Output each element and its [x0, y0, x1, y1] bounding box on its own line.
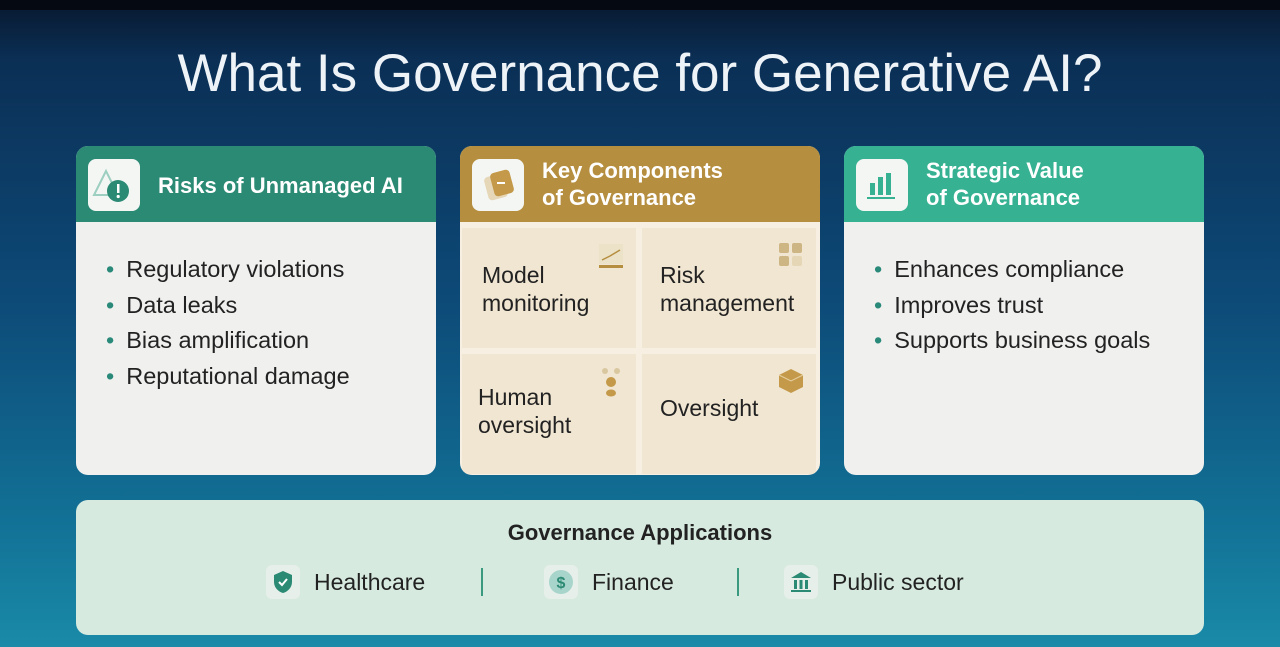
cell: oversight	[642, 354, 816, 474]
header: strategic: Strategic Value	[926, 158, 1084, 183]
panel: applications	[76, 500, 1204, 635]
list: strategic: Improves trust	[894, 292, 1043, 318]
cell: model monitoring: Model	[482, 262, 545, 288]
title: What Is Governance for Generative AI?	[177, 44, 1102, 103]
cell: human oversight: Human	[478, 384, 552, 410]
list: risks: Reputational damage	[126, 362, 350, 388]
app: finance	[544, 565, 674, 599]
header: components: of Governance	[542, 185, 696, 210]
cell: human oversight: oversight	[478, 412, 571, 438]
header: risks: Risks of Unmanaged AI	[158, 173, 403, 198]
panel: risks	[76, 146, 436, 475]
app: finance: Finance	[592, 568, 674, 594]
list: strategic: Supports business goals	[894, 327, 1150, 353]
app: public sector	[784, 565, 964, 599]
cell: risk management: management	[660, 290, 794, 316]
list: risks	[106, 256, 350, 389]
icon: bar chart	[856, 159, 908, 211]
cell: model monitoring: monitoring	[482, 290, 589, 316]
heading: applications: Governance Applications	[508, 520, 772, 545]
cell: risk management: Risk	[660, 262, 705, 288]
icon: warning	[88, 159, 140, 211]
panel: key components	[460, 146, 820, 475]
app: healthcare: Healthcare	[314, 568, 425, 594]
list: strategic: Enhances compliance	[894, 256, 1124, 282]
cell: human oversight	[462, 354, 636, 474]
cell: model monitoring	[462, 228, 636, 348]
header: components: Key Components	[542, 158, 723, 183]
icon: document	[472, 159, 524, 211]
list: risks: Regulatory violations	[126, 256, 344, 282]
cell: risk management	[642, 228, 816, 348]
list: risks: Data leaks	[126, 292, 237, 318]
list: strategic	[874, 256, 1150, 353]
cell: oversight: Oversight	[660, 395, 758, 421]
header: components	[460, 146, 820, 222]
header: risks	[76, 146, 436, 222]
panel: strategic value	[844, 146, 1204, 475]
app: healthcare	[266, 565, 425, 599]
header: strategic: of Governance	[926, 185, 1080, 210]
app: public sector: Public sector	[832, 568, 964, 594]
header: strategic	[844, 146, 1204, 222]
app: finance: $	[557, 575, 566, 592]
list: risks: Bias amplification	[126, 327, 309, 353]
